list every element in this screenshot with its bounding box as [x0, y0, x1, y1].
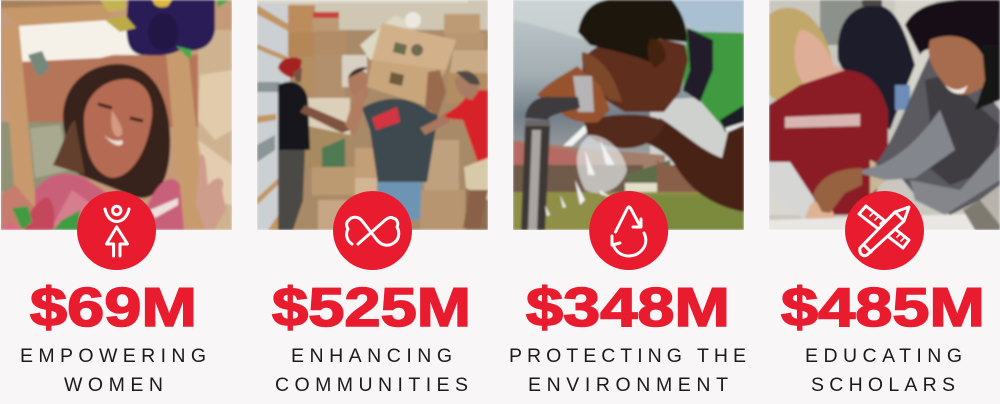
label: enhancing communities: ENHANCING	[291, 345, 452, 367]
icon: woman with raised arms	[77, 191, 156, 270]
panel: protecting the environment	[509, 0, 746, 396]
amount: $69M: $69M	[30, 276, 197, 338]
label: educating scholars: SCHOLARS	[811, 374, 955, 396]
label: protecting the environment	[509, 345, 746, 396]
label: empowering women: EMPOWERING	[20, 345, 206, 367]
icon: water drop with recycling arrow	[589, 191, 668, 270]
label: protecting the environment: PROTECTING THE	[509, 345, 746, 367]
photo: woman behind a wooden frame	[0, 0, 232, 230]
icon: infinity loop with hearts	[333, 191, 412, 270]
amount: $525M: $525M	[272, 276, 471, 338]
label: educating scholars: EDUCATING	[805, 345, 962, 367]
amount: $485M: $485M	[781, 276, 985, 338]
panel: educating scholars	[769, 0, 1000, 396]
photo: child drinking water from a tap	[513, 0, 744, 230]
label: enhancing communities: COMMUNITIES	[275, 374, 468, 396]
label: protecting the environment: ENVIRONMENT	[528, 374, 728, 396]
amount: $348M: $348M	[526, 276, 730, 338]
photo: volunteers carrying cardboard boxes in a truck	[257, 0, 488, 230]
label: enhancing communities	[275, 345, 468, 396]
label: empowering women: WOMEN	[64, 374, 163, 396]
label: empowering women	[20, 345, 206, 396]
photo: student and mentor working at a table	[769, 0, 1000, 230]
label: educating scholars	[805, 345, 962, 396]
panel: empowering women	[0, 0, 232, 396]
icon: crossed pencil and ruler	[845, 191, 924, 270]
panel: enhancing communities	[257, 0, 488, 396]
